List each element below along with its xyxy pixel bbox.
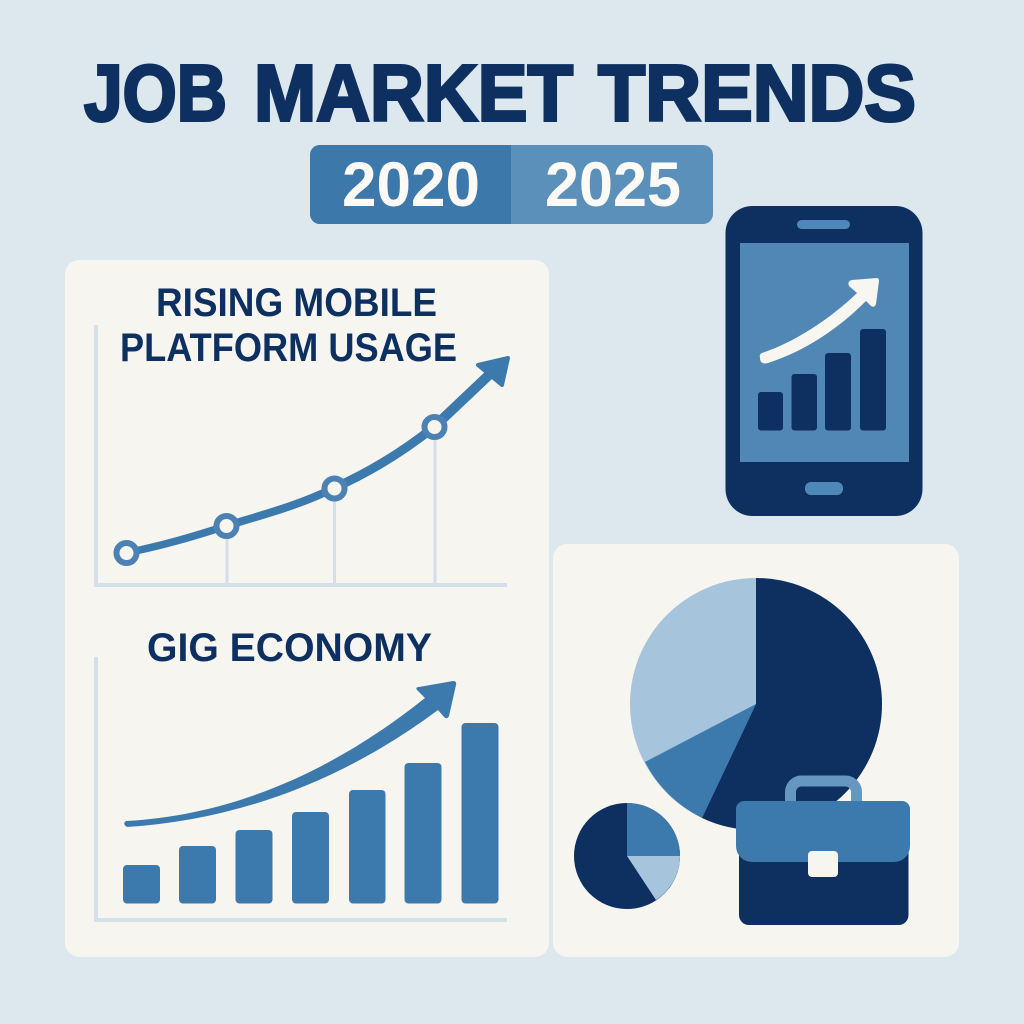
year range badge: 2020 (342, 150, 480, 220)
year range badge (310, 145, 713, 224)
line chart: mobile usage (96, 325, 508, 585)
heading: rising mobile platform usage: PLATFORM USAGE (120, 326, 457, 370)
panel: rising mobile platform usage (65, 260, 549, 957)
year range badge: 2025 (545, 150, 681, 220)
title: JOB (84, 48, 227, 138)
heading: rising mobile platform usage: RISING MOBILE (156, 281, 437, 325)
small pie chart (574, 803, 680, 909)
icon: smartphone with growth chart (726, 206, 922, 516)
panel: pie charts and briefcase (553, 544, 959, 957)
title: TRENDS (598, 48, 916, 138)
title (84, 48, 916, 138)
icon: briefcase (736, 781, 910, 925)
large pie chart (630, 578, 882, 830)
title: MARKET (254, 48, 573, 138)
heading: gig economy: GIG ECONOMY (147, 626, 432, 670)
bar chart: gig economy (96, 657, 507, 920)
